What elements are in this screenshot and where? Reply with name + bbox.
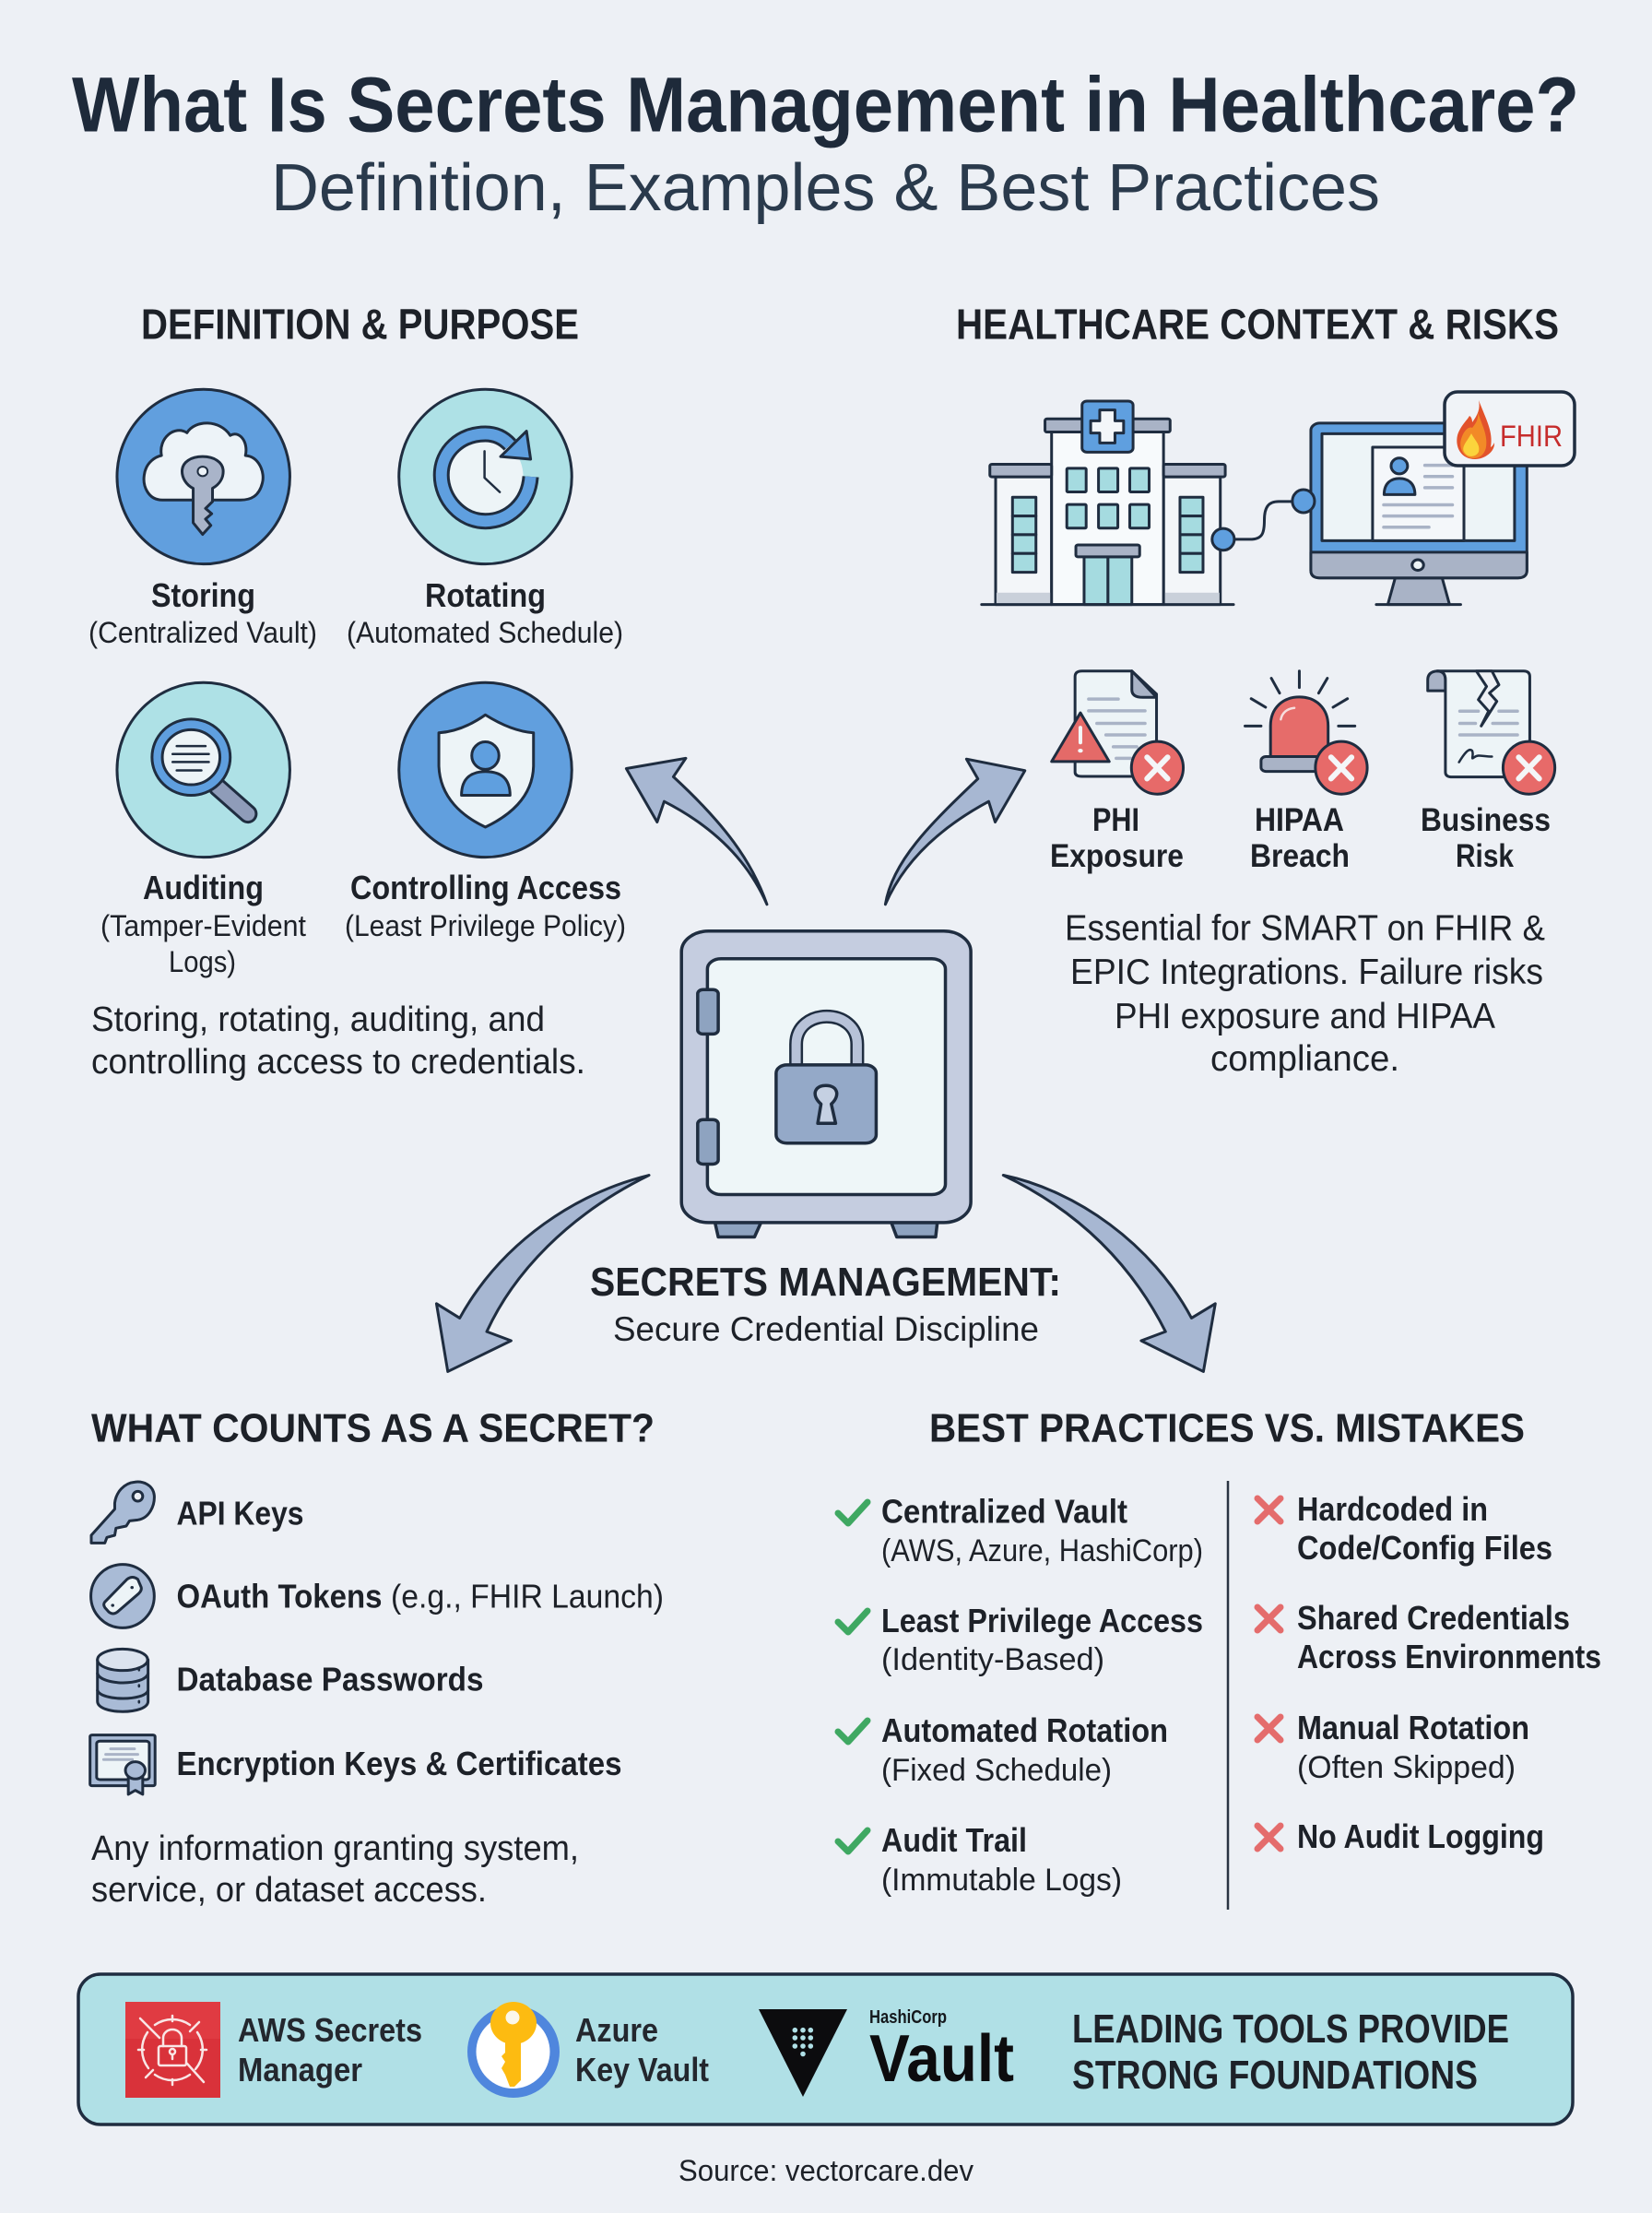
icon: AWS Secrets Manager logo bbox=[125, 2002, 220, 2098]
label: HIPAA breach bbox=[1250, 802, 1350, 874]
sublabel: logs: Logs) bbox=[169, 945, 236, 978]
text: healthcare context summary: Essential for SMART on FHIR & bbox=[1065, 909, 1545, 948]
label: business risk: Business bbox=[1421, 802, 1551, 838]
sublabel: tamper evident: (Tamper-Evident bbox=[100, 909, 306, 942]
title: What Is Secrets Management in Healthcare? bbox=[72, 61, 1579, 148]
label: AWS Secrets Manager: Manager bbox=[238, 2051, 362, 2089]
label: Azure Key Vault: Key Vault bbox=[575, 2051, 709, 2089]
label: central subtitle: Secure Credential Discipline bbox=[613, 1310, 1039, 1348]
panel: healthcare context and risks bbox=[956, 301, 1575, 1079]
panel: best practices vs mistakes bbox=[838, 1405, 1601, 1910]
arrow: up left bbox=[626, 758, 767, 905]
icon: HIPAA alarm bbox=[1245, 671, 1367, 794]
text: healthcare context summary: compliance. bbox=[1210, 1039, 1399, 1079]
mistake: manual rotation: Manual Rotation bbox=[1297, 1709, 1529, 1746]
arrow: up right bbox=[885, 759, 1025, 905]
icon: FHIR badge: FHIR bbox=[1500, 420, 1563, 453]
label: business risk bbox=[1421, 802, 1551, 874]
label: Azure Key Vault: Azure bbox=[575, 2011, 658, 2049]
text: leading tools message bbox=[1072, 2006, 1509, 2098]
label: rotating: Rotating bbox=[425, 576, 546, 614]
practice: audit trail: (Immutable Logs) bbox=[881, 1863, 1122, 1898]
icon: controlling access shield bbox=[399, 682, 572, 858]
practice: centralized vault: Centralized Vault bbox=[881, 1492, 1127, 1531]
heading: definition: DEFINITION & PURPOSE bbox=[141, 301, 579, 349]
mistake: shared credentials: Across Environments bbox=[1297, 1638, 1601, 1675]
label: PHI exposure: PHI bbox=[1092, 802, 1139, 838]
icon: auditing magnifier bbox=[117, 682, 289, 858]
text: healthcare context summary: EPIC Integrations. Failure risks bbox=[1070, 953, 1543, 992]
icon: Azure Key Vault logo bbox=[467, 2002, 560, 2098]
icon: certificate bbox=[90, 1735, 155, 1794]
item: database passwords: Database Passwords bbox=[177, 1660, 483, 1698]
label: PHI exposure: Exposure bbox=[1050, 838, 1184, 874]
practice: automated rotation: Automated Rotation bbox=[881, 1711, 1168, 1749]
mistake: manual rotation bbox=[1297, 1709, 1529, 1785]
icons: green checks bbox=[838, 1502, 867, 1852]
label: controlling access: Controlling Access bbox=[350, 869, 621, 906]
heading: best practices: BEST PRACTICES VS. MISTAKES bbox=[929, 1405, 1525, 1451]
label: HashiCorp Vault: Vault bbox=[869, 2022, 1014, 2096]
practice: least privilege: (Identity-Based) bbox=[881, 1642, 1104, 1677]
label: business risk: Risk bbox=[1456, 838, 1514, 874]
mistake: shared credentials bbox=[1297, 1599, 1601, 1675]
panel: leading tools banner bbox=[78, 1974, 1573, 2124]
practice: least privilege: Least Privilege Access bbox=[881, 1602, 1203, 1639]
text: secret summary: Any information granting system, bbox=[91, 1829, 579, 1868]
label: auditing: Auditing bbox=[143, 869, 264, 906]
sublabel: centralized vault: (Centralized Vault) bbox=[88, 616, 317, 649]
text: healthcare context summary bbox=[1065, 909, 1545, 1079]
mistake: hardcoded bbox=[1297, 1490, 1552, 1567]
practice: audit trail: Audit Trail bbox=[881, 1821, 1027, 1859]
arrow: down right bbox=[1003, 1176, 1215, 1371]
text: secret summary: service, or dataset access. bbox=[91, 1871, 487, 1910]
icon: FHIR badge bbox=[1445, 392, 1575, 466]
label: HashiCorp Vault: HashiCorp bbox=[869, 2007, 947, 2028]
text: healthcare context summary: PHI exposure and HIPAA bbox=[1115, 997, 1495, 1036]
icon: database bbox=[98, 1649, 148, 1711]
icon: API key bbox=[91, 1482, 154, 1543]
sublabel: automated schedule: (Automated Schedule) bbox=[347, 616, 623, 649]
sublabel: least privilege: (Least Privilege Policy) bbox=[345, 909, 626, 942]
heading: what counts: WHAT COUNTS AS A SECRET? bbox=[91, 1405, 655, 1451]
item: OAuth tokens: (e.g., FHIR Launch) bbox=[391, 1577, 664, 1615]
icon: monitor with patient record bbox=[1292, 423, 1527, 605]
practice: centralized vault bbox=[881, 1492, 1203, 1568]
label: AWS Secrets Manager: AWS Secrets bbox=[238, 2011, 422, 2049]
label: PHI exposure bbox=[1050, 802, 1184, 874]
label: Azure Key Vault bbox=[575, 2011, 709, 2089]
icons: red crosses bbox=[1257, 1498, 1280, 1849]
practice: audit trail bbox=[881, 1821, 1122, 1898]
heading: healthcare context: HEALTHCARE CONTEXT & RISKS bbox=[956, 301, 1559, 349]
label: storing: Storing bbox=[151, 576, 255, 614]
mistake: manual rotation: (Often Skipped) bbox=[1297, 1750, 1516, 1785]
practice: least privilege bbox=[881, 1602, 1203, 1677]
text: definition summary: Storing, rotating, auditing, and bbox=[91, 1000, 545, 1039]
source line: Source: vectorcare.dev bbox=[678, 2154, 974, 2187]
text: leading tools message: STRONG FOUNDATIONS bbox=[1072, 2053, 1478, 2098]
label: HIPAA breach: Breach bbox=[1250, 838, 1350, 874]
icon: OAuth token bbox=[91, 1565, 154, 1627]
practice: centralized vault: (AWS, Azure, HashiCorp) bbox=[881, 1533, 1203, 1568]
text: secret summary bbox=[91, 1829, 579, 1910]
mistake: no audit logging: No Audit Logging bbox=[1297, 1817, 1544, 1855]
label: central title: SECRETS MANAGEMENT: bbox=[590, 1260, 1061, 1305]
text: definition summary: controlling access to credentials. bbox=[91, 1043, 585, 1082]
icon: business risk contract bbox=[1428, 671, 1555, 794]
arrow: down left bbox=[436, 1176, 649, 1371]
icon: hospital bbox=[982, 401, 1233, 605]
item: OAuth tokens bbox=[177, 1577, 664, 1615]
panel: what counts as a secret bbox=[90, 1405, 664, 1910]
subtitle: Definition, Examples & Best Practices bbox=[271, 151, 1380, 225]
label: HIPAA breach: HIPAA bbox=[1255, 802, 1344, 838]
mistake: hardcoded: Hardcoded in bbox=[1297, 1490, 1488, 1528]
icon: PHI exposure bbox=[1052, 671, 1184, 794]
text: definition summary bbox=[91, 1000, 585, 1082]
label: AWS Secrets Manager bbox=[238, 2011, 422, 2089]
item: OAuth tokens: OAuth Tokens bbox=[177, 1577, 382, 1615]
practice: automated rotation: (Fixed Schedule) bbox=[881, 1753, 1112, 1788]
icon: connector bbox=[1212, 502, 1293, 550]
icon: rotating clock bbox=[399, 389, 572, 564]
item: encryption keys: Encryption Keys & Certificates bbox=[177, 1745, 621, 1782]
mistake: hardcoded: Code/Config Files bbox=[1297, 1529, 1552, 1567]
practice: automated rotation bbox=[881, 1711, 1168, 1788]
text: leading tools message: LEADING TOOLS PROVIDE bbox=[1072, 2006, 1509, 2052]
icon: HashiCorp Vault logo bbox=[759, 2009, 847, 2097]
icon: central safe bbox=[681, 931, 971, 1237]
panel: definition and purpose bbox=[88, 301, 626, 1082]
mistake: shared credentials: Shared Credentials bbox=[1297, 1599, 1570, 1637]
item: API keys: API Keys bbox=[177, 1494, 304, 1533]
icon: storing cloud key bbox=[117, 389, 289, 564]
